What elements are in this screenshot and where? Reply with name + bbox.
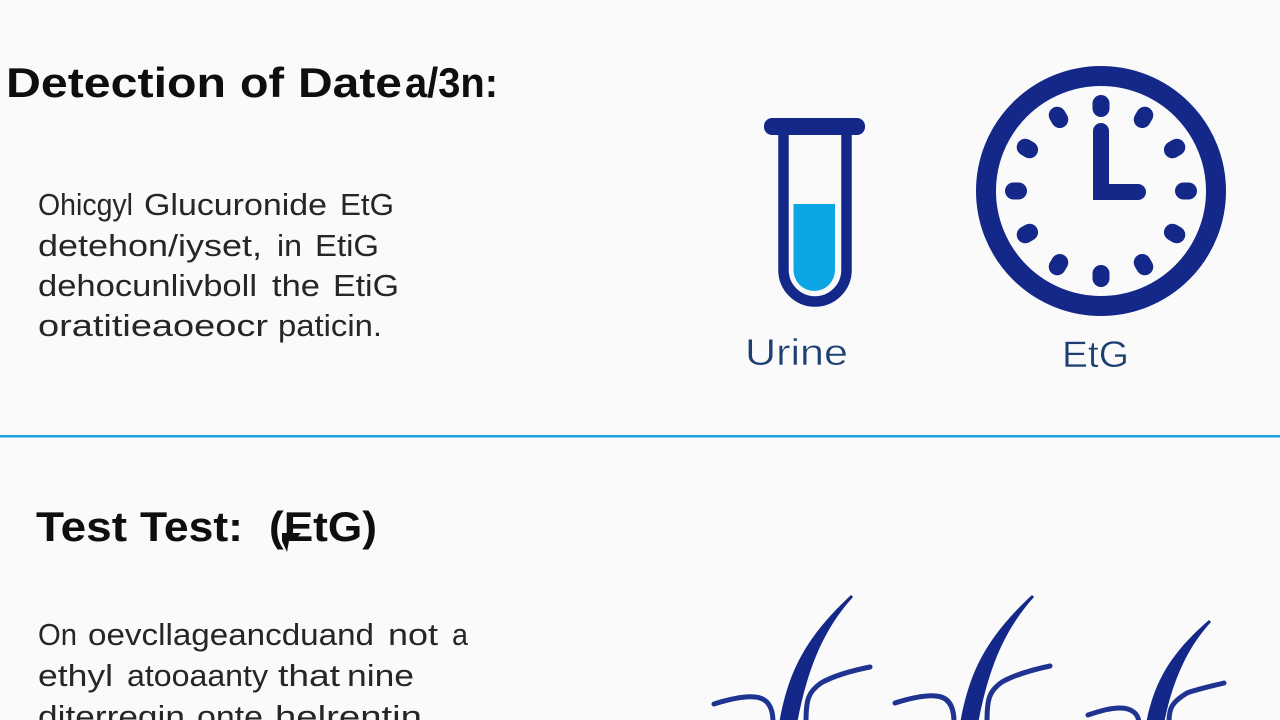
text block: detection description: EtG — [340, 187, 394, 222]
text block: detection description: Ohicgyl — [38, 187, 133, 222]
text block: detection description: the — [272, 268, 320, 303]
text block: detection description: in — [277, 228, 302, 263]
heading: test: (EtG) — [269, 503, 377, 550]
heading: test: Test: — [140, 503, 243, 550]
text block: test description: ethyl — [38, 658, 113, 693]
heading: test: Test — [36, 503, 127, 550]
text block: detection description: oratitieaoeocr — [38, 308, 268, 343]
text block: test description: nine — [347, 658, 414, 693]
label: EtG: EtG — [1062, 334, 1129, 375]
heading: detection: Detection — [6, 59, 226, 106]
text block: detection description: detehon/iyset, — [38, 228, 262, 263]
text block: test description: a — [452, 617, 469, 652]
heading: detection — [6, 59, 498, 106]
text block: test description: that — [278, 658, 340, 693]
text block: test description: not — [388, 617, 438, 652]
heading: test — [36, 503, 377, 552]
text block: test description: On — [38, 617, 77, 652]
text block: test description — [38, 617, 469, 720]
text block: test description: oevcllageancduand — [88, 617, 374, 652]
text block: test description: atooaanty — [127, 658, 269, 693]
heading: detection: of — [240, 59, 285, 106]
text block: detection description: EtiG — [315, 228, 379, 263]
text block: detection description: dehocunlivboll — [38, 268, 257, 303]
text block: detection description: EtiG — [333, 268, 399, 303]
icon: urine test tube — [764, 118, 865, 302]
label: urine: Urine — [745, 332, 848, 373]
text block: detection description — [38, 187, 399, 343]
text block: detection description: Glucuronide — [144, 187, 327, 222]
icon: hair strand two — [895, 595, 1050, 720]
panel: EtG test text — [36, 503, 469, 720]
text block: detection description: paticin. — [278, 308, 382, 343]
heading: detection: a/3n: — [405, 59, 498, 106]
heading: detection: Date — [298, 59, 402, 106]
icon: hair strand three — [1088, 620, 1224, 720]
icon: hair strand one — [714, 595, 870, 720]
icon: clock — [986, 76, 1216, 306]
panel: detection of EtG text — [6, 59, 498, 343]
